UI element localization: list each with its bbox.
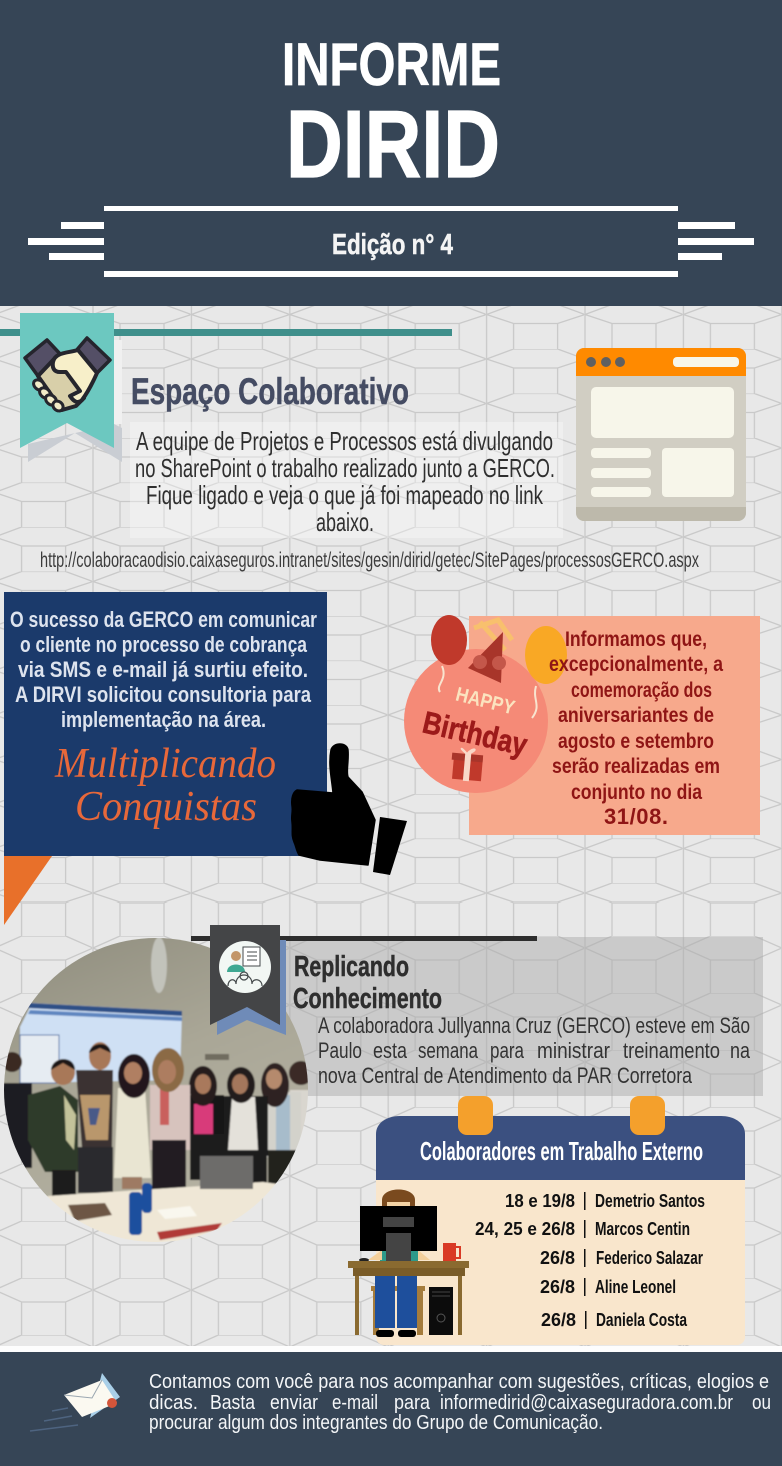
heading	[293, 951, 442, 1015]
schedule list: 18 e 19/8	[505, 1191, 575, 1211]
text block: excepcionalmente, a	[549, 653, 723, 676]
schedule list: Demetrio Santos	[595, 1191, 705, 1211]
text block: enviar	[270, 1392, 318, 1414]
text block	[130, 422, 563, 538]
right persons	[290, 1089, 308, 1136]
script heading: Conquistas	[75, 784, 257, 830]
text block: conjunto no dia	[571, 781, 702, 804]
text block: Paulo	[318, 1038, 362, 1063]
script heading: Multiplicando	[54, 741, 276, 787]
birthday badge: HAPPY	[453, 684, 518, 720]
text block: e-mail	[332, 1392, 378, 1414]
text block: aniversariantes de	[558, 704, 714, 727]
panel: Multiplicando Conquistas	[4, 592, 407, 925]
schedule list: 24, 25 e 26/8	[475, 1219, 575, 1239]
heading: Espaço Colaborativo	[131, 371, 409, 412]
heading: Replicando	[294, 951, 409, 983]
text block	[149, 1371, 771, 1434]
schedule list: 26/8	[541, 1310, 576, 1330]
text block: via SMS e e-mail já surtiu efeito.	[18, 657, 308, 682]
title: DIRID: DIRID	[286, 91, 500, 198]
icon: thumbs up	[292, 744, 407, 875]
panel: header	[0, 0, 782, 306]
text block: agosto e setembro	[558, 730, 714, 753]
far-left person	[0, 1083, 32, 1168]
panel: Replicando Conhecimento	[210, 925, 751, 1088]
text block: para	[490, 1038, 525, 1063]
panel: Replicando Conhecimento background	[191, 936, 763, 1096]
text block: semana	[418, 1038, 479, 1063]
text block: para	[394, 1392, 431, 1414]
title: Informe: INFORME	[282, 31, 501, 98]
text block: na	[730, 1038, 751, 1063]
panel: birthday notice	[404, 615, 760, 835]
table	[47, 1180, 276, 1242]
text block: ministrar	[537, 1038, 610, 1063]
text block: Basta	[210, 1392, 256, 1414]
text block	[318, 1013, 751, 1088]
text block	[10, 607, 317, 732]
panel: Espaço Colaborativo	[0, 313, 746, 572]
schedule list: Marcos Centin	[595, 1219, 690, 1239]
panel: Colaboradores em Trabalho Externo calendar	[348, 1096, 745, 1345]
text block: 31/08.	[604, 804, 668, 829]
script heading	[54, 741, 276, 830]
text block: comemoração dos	[571, 679, 712, 702]
schedule list	[475, 1191, 705, 1330]
text block: Fique ligado e veja o que já foi mapeado no link	[146, 480, 544, 510]
text block: procurar algum dos integrantes do Grupo de Comunicação.	[149, 1412, 603, 1434]
birthday badge	[404, 615, 567, 793]
schedule list: Aline Leonel	[595, 1277, 676, 1297]
text block: A DIRVI solicitou consultoria para	[15, 682, 312, 707]
photo: team at training	[0, 930, 320, 1250]
icon: person at desk	[348, 1190, 469, 1337]
panel: footer	[0, 1346, 782, 1466]
edition banner: Edição n° 4	[332, 229, 453, 261]
text block: abaixo.	[316, 507, 374, 537]
ribbon with training icon	[210, 925, 286, 1035]
text block: implementação na área.	[61, 707, 266, 732]
text block: treinamento	[623, 1038, 720, 1063]
text block: o cliente no processo de cobrança	[20, 632, 308, 657]
edition banner	[28, 206, 754, 277]
text block: no SharePoint o trabalho realizado junto a GERCO.	[135, 453, 555, 483]
schedule list: 26/8	[540, 1277, 575, 1297]
text block	[549, 628, 723, 829]
text block: Informamos que,	[565, 628, 707, 651]
text block: serão realizadas em	[552, 755, 720, 778]
text block: informedirid@caixaseguradora.com.br	[440, 1392, 733, 1414]
text block: dicas.	[149, 1392, 198, 1414]
text block: esta	[373, 1038, 408, 1063]
schedule list: 26/8	[540, 1248, 575, 1268]
patterned background	[0, 306, 782, 1352]
ribbon with handshake icon	[20, 313, 122, 462]
text block: A equipe de Projetos e Processos está divulgando	[136, 426, 553, 456]
middle persons	[150, 1085, 190, 1150]
text block: nova Central de Atendimento da PAR Corretora	[318, 1063, 693, 1088]
schedule list: Daniela Costa	[596, 1310, 688, 1330]
text block: ou	[752, 1392, 771, 1414]
icon: flying envelope	[30, 1373, 120, 1431]
schedule list: Federico Salazar	[596, 1248, 703, 1268]
heading: Conhecimento	[293, 983, 442, 1015]
icon: browser window	[576, 348, 746, 521]
text block: O sucesso da GERCO em comunicar	[10, 607, 317, 632]
birthday badge: Birthday	[419, 705, 531, 763]
